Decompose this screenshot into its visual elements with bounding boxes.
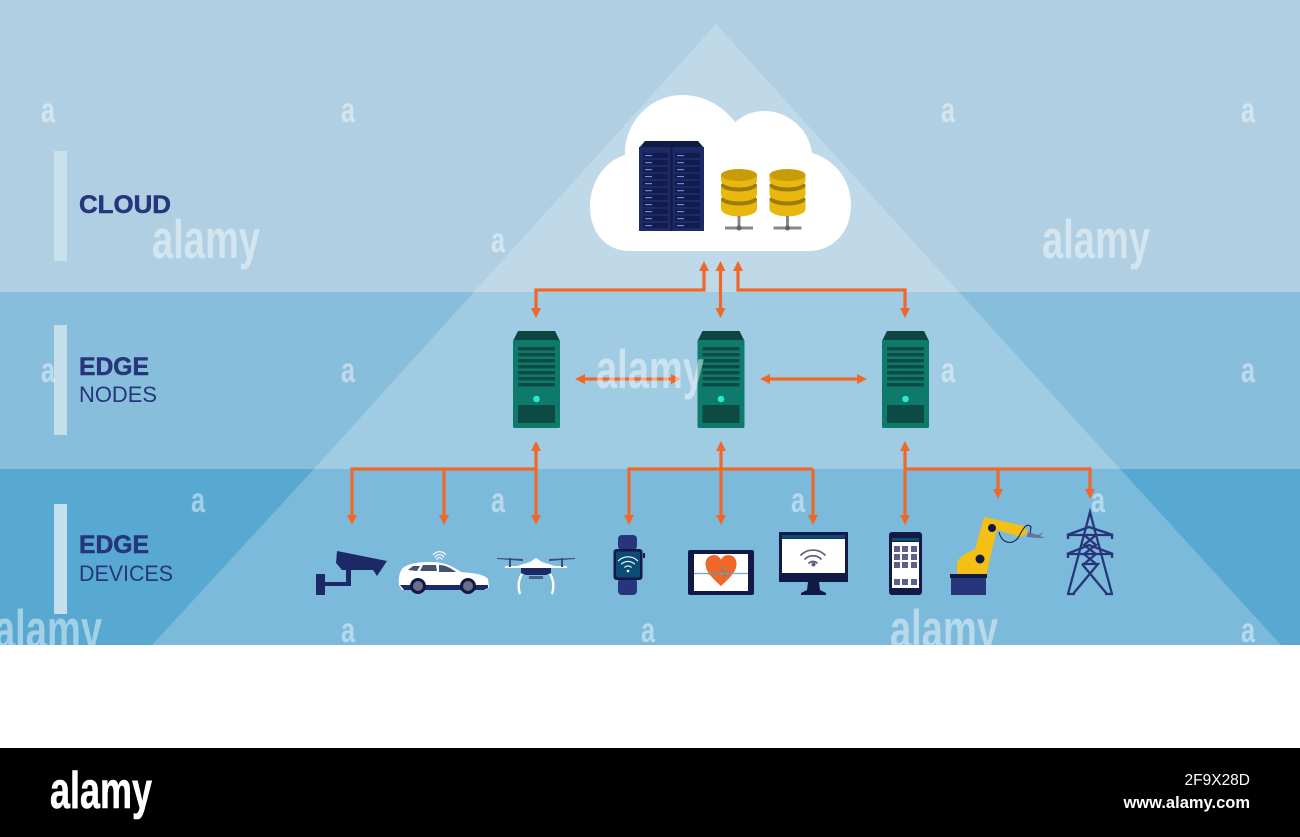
watermarks: a bbox=[1091, 481, 1105, 520]
icon: drone bbox=[497, 558, 575, 594]
watermarks: a bbox=[941, 351, 955, 390]
watermarks: alamy bbox=[890, 598, 998, 660]
icon: desktop monitor bbox=[779, 532, 848, 595]
watermarks: a bbox=[791, 481, 805, 520]
icon: power pylon bbox=[1067, 512, 1113, 594]
background: edge nodes band bbox=[0, 292, 1300, 469]
watermarks: alamy bbox=[152, 208, 260, 270]
label: edge nodes bbox=[54, 325, 157, 435]
label: edge devices: EDGE bbox=[79, 531, 149, 559]
watermarks: alamy bbox=[1042, 208, 1150, 270]
edge node server 3 bbox=[882, 331, 929, 428]
watermarks: a bbox=[341, 91, 355, 130]
label: edge nodes: EDGE bbox=[79, 353, 149, 381]
arrows: cloud to nodes bbox=[531, 261, 910, 318]
watermarks: a bbox=[41, 351, 55, 390]
edge node server 2 bbox=[698, 331, 744, 428]
cloud icon bbox=[590, 95, 851, 251]
label: cloud: CLOUD bbox=[79, 191, 171, 219]
footer logo: alamy bbox=[50, 762, 152, 820]
icon: tablet with heart bbox=[688, 550, 754, 595]
watermarks: a bbox=[941, 91, 955, 130]
footer image id: 2F9X28D bbox=[1185, 772, 1250, 789]
watermarks: a bbox=[1241, 91, 1255, 130]
watermarks: a bbox=[641, 611, 655, 650]
watermarks: a bbox=[191, 481, 205, 520]
icon: robot arm bbox=[950, 517, 1045, 595]
label: edge nodes: NODES bbox=[79, 382, 157, 407]
watermarks: a bbox=[491, 481, 505, 520]
server rack bbox=[639, 141, 704, 231]
watermarks: a bbox=[341, 351, 355, 390]
footer white space bbox=[0, 645, 1300, 748]
icon: smartwatch bbox=[614, 535, 645, 595]
watermarks: a bbox=[1241, 611, 1255, 650]
arrows: between nodes bbox=[575, 374, 867, 384]
background: cloud band bbox=[0, 0, 1300, 292]
database 1 bbox=[721, 169, 757, 230]
footer black bar bbox=[0, 748, 1300, 837]
watermarks: a bbox=[1241, 351, 1255, 390]
edge node server 1 bbox=[513, 331, 560, 428]
label: edge devices bbox=[54, 504, 173, 614]
watermarks: a bbox=[341, 611, 355, 650]
icon: smartphone bbox=[889, 532, 922, 595]
arrows: nodes to devices bbox=[347, 441, 1095, 525]
icon: security camera bbox=[316, 551, 387, 595]
icon: connected car bbox=[399, 552, 489, 594]
footer url: www.alamy.com bbox=[1122, 794, 1250, 812]
watermarks: a bbox=[41, 91, 55, 130]
label: edge devices: DEVICES bbox=[79, 561, 173, 586]
watermarks: alamy bbox=[596, 338, 704, 400]
label: cloud bbox=[54, 151, 171, 261]
background: edge devices band bbox=[0, 469, 1300, 645]
watermarks: a bbox=[491, 221, 505, 260]
watermarks bbox=[0, 91, 1255, 660]
database 2 bbox=[770, 169, 806, 230]
pyramid bbox=[152, 24, 1281, 645]
